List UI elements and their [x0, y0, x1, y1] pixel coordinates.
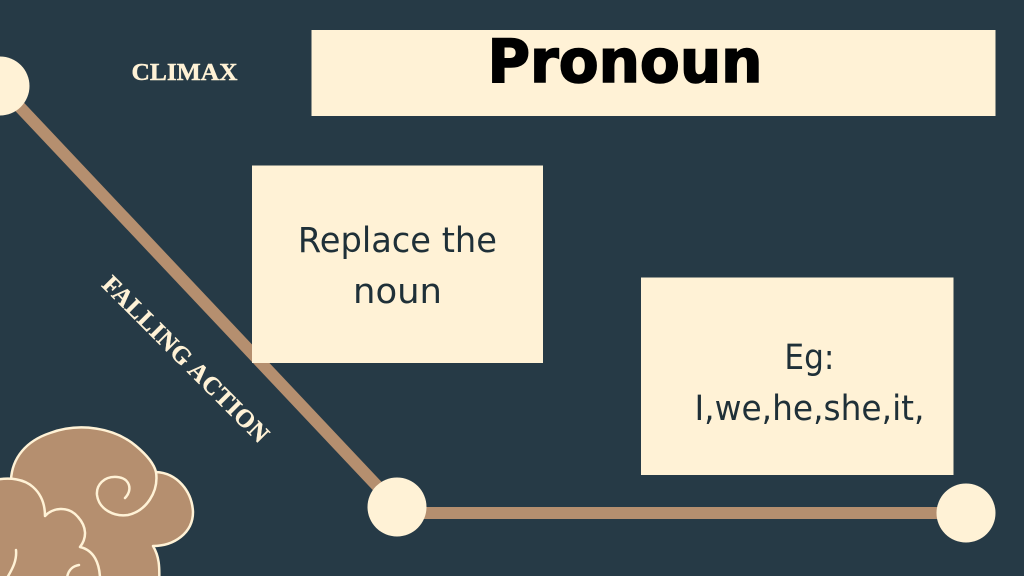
title: Pronoun: Pronoun: [488, 27, 762, 97]
node: climax point: [0, 56, 30, 116]
cloud front lobes: [0, 479, 100, 576]
title panel: [312, 27, 996, 116]
node: resolution point: [936, 484, 996, 542]
panel: definition: [252, 166, 543, 363]
label: climax: CLIMAX: [132, 60, 238, 86]
node: falling action end point: [368, 478, 426, 536]
timeline: connecting lines: [0, 86, 966, 513]
text: Replace the noun: noun: [353, 272, 442, 312]
text: examples of pronouns: Eg:: [784, 338, 834, 378]
cloud swirls: [97, 472, 156, 515]
text: Replace the noun: Replace the: [298, 221, 497, 261]
panel: examples: [641, 278, 954, 475]
text: examples of pronouns: I,we,he,she,it,: [694, 389, 924, 429]
cloud back lobes: [0, 427, 193, 576]
icon: cloud: [0, 427, 193, 576]
label: falling action: FALLING ACTION: [97, 271, 274, 448]
